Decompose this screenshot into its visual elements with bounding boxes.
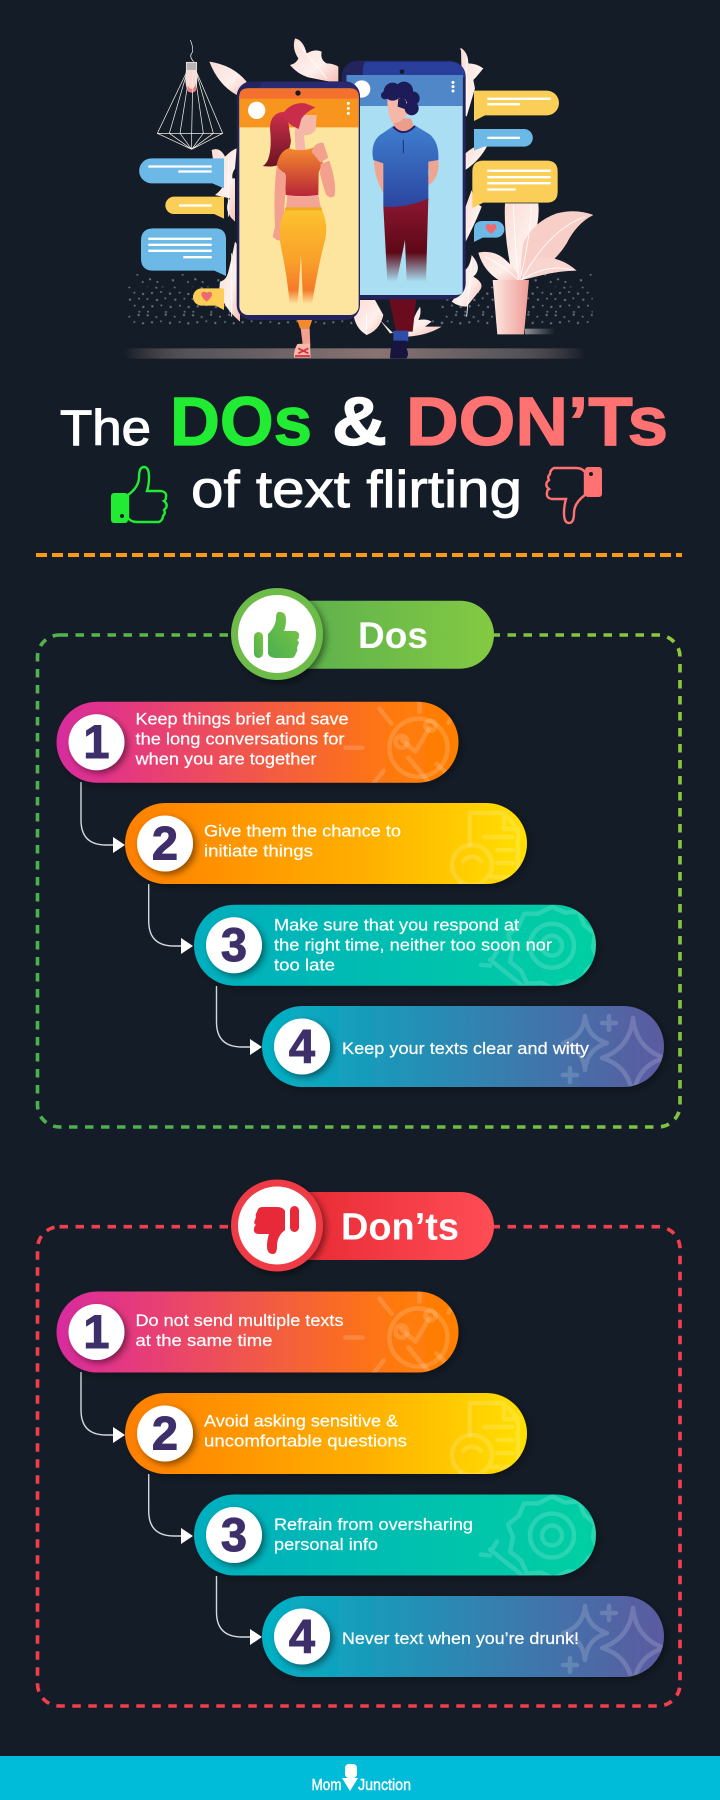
don't step 1 [56, 1292, 458, 1374]
don't step 2: 2 [152, 1406, 178, 1460]
don't step 2: Avoid asking sensitive & [204, 1413, 398, 1431]
don't step 3 [194, 1494, 596, 1578]
do step 3: Make sure that you respond at [274, 917, 519, 935]
chat bubble: blue right 2 [474, 129, 533, 151]
don't step 3: personal info [274, 1536, 378, 1554]
title line 1: DON’Ts [406, 383, 668, 460]
do step 2: Give them the chance to [204, 823, 401, 841]
connector arrow 1 [81, 782, 125, 853]
do step 2 [125, 803, 527, 893]
connector arrow 3 [216, 986, 262, 1055]
do step 3: too late [274, 957, 335, 975]
do step 2: initiate things [204, 843, 313, 861]
front phone: orange [237, 81, 360, 320]
do step 4: 4 [289, 1020, 315, 1072]
don't step 1: Do not send multiple texts [136, 1312, 344, 1330]
icon: outlined thumbs down [546, 467, 602, 523]
logo: MomJunction: Junction [358, 1777, 411, 1794]
do step 4: Keep your texts clear and witty [342, 1040, 590, 1058]
do step 3 [194, 904, 596, 988]
title line 1: & [332, 383, 387, 460]
connector arrow 2 [149, 1474, 193, 1544]
back phone: blue [342, 61, 466, 299]
woman figure [263, 103, 335, 304]
chat bubble: blue left 3 [141, 228, 226, 276]
dotted ground pattern [127, 274, 593, 327]
do step 1: Keep things brief and save [136, 711, 348, 729]
don't step 4: Never text when you’re drunk! [342, 1630, 579, 1648]
panel: dos [38, 588, 680, 1127]
title line 1 [60, 383, 668, 460]
do step 1 [56, 702, 458, 784]
man's lower legs [388, 295, 417, 358]
leaf veins [228, 42, 472, 335]
connector arrow 1 [81, 1372, 125, 1443]
logo: MomJunction: Mom [312, 1777, 342, 1794]
do step 3: 3 [221, 918, 247, 971]
chat bubble: yellow right 3 [472, 161, 558, 208]
don'ts header [231, 1180, 494, 1272]
do step 1: 1 [83, 715, 110, 768]
title line 1: DOs [170, 383, 312, 460]
don't step 3: 3 [221, 1508, 247, 1561]
title line 1: The [60, 400, 151, 456]
floor shadow bar [123, 348, 585, 359]
connector arrow 3 [216, 1576, 262, 1645]
don'ts header: Don’ts [341, 1206, 459, 1248]
chat bubble: heart blue [474, 221, 504, 242]
woman's lower legs [294, 318, 313, 358]
don't step 2: uncomfortable questions [204, 1433, 407, 1451]
chat bubble: blue left 1 [139, 158, 224, 188]
footer band with logo [0, 1756, 720, 1800]
do step 3: the right time, neither too soon nor [274, 937, 553, 955]
don't step 1: 1 [83, 1305, 110, 1358]
don't step 2 [125, 1393, 527, 1483]
pendant lamp [157, 40, 223, 149]
do step 4 [260, 1006, 664, 1088]
icon: outlined thumbs up [111, 467, 167, 523]
title line 2: of text flirting [191, 461, 522, 519]
chat bubble: yellow left 2 [165, 197, 224, 219]
plant in pot [478, 203, 593, 334]
decorative leaves [209, 38, 489, 337]
do step 1: the long conversations for [136, 731, 345, 749]
do step 2: 2 [152, 816, 178, 870]
don't step 3: Refrain from oversharing [274, 1516, 473, 1534]
don't step 4: 4 [289, 1610, 315, 1662]
don't step 4 [260, 1596, 664, 1678]
man figure [372, 82, 439, 282]
do step 1: when you are together [134, 751, 317, 769]
dos header: Dos [358, 615, 428, 656]
logo: MomJunction [312, 1764, 411, 1794]
don't step 1: at the same time [136, 1332, 272, 1350]
chat bubble: yellow right 1 [474, 91, 559, 121]
illustration: couple in phones with chat bubbles [123, 38, 593, 359]
panel: don'ts [38, 1180, 680, 1706]
connector arrow 2 [149, 884, 193, 954]
chat bubble: heart yellow [193, 288, 224, 310]
dos header [231, 588, 494, 680]
